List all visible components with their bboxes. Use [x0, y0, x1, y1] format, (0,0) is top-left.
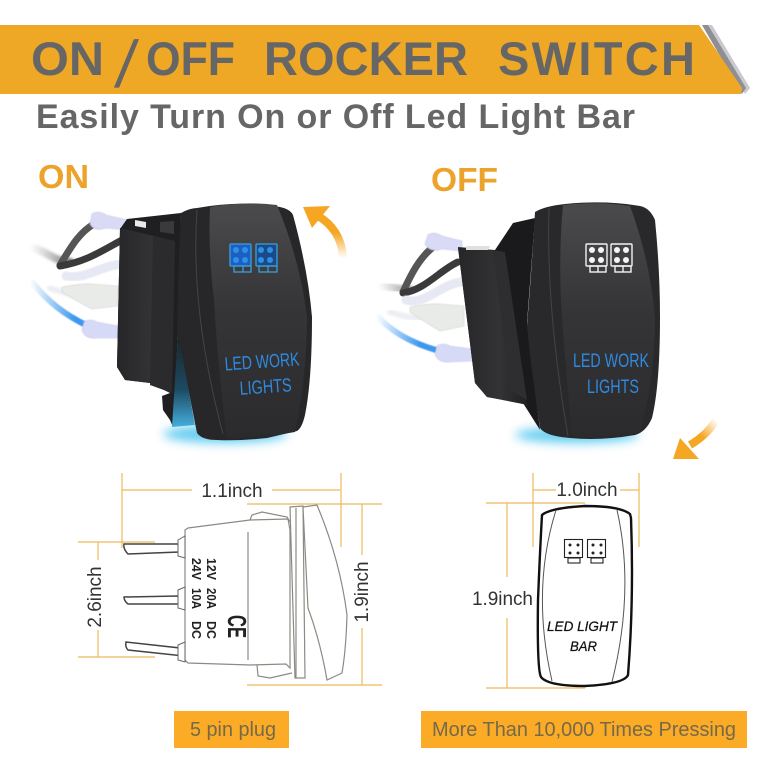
- switch side outline: [185, 505, 347, 680]
- dimension lines: [78, 473, 382, 685]
- wires: [30, 224, 122, 326]
- dimension: 2.6inch: 2.6inch: [85, 566, 106, 628]
- front dimension drawing: [472, 473, 639, 688]
- OFF switch illustration: [378, 202, 660, 443]
- dimension: 1.1inch: 1.1inch: [201, 481, 263, 502]
- switch legend: LIGHTS: [239, 375, 292, 400]
- wires: [378, 248, 462, 350]
- rocker face: [210, 203, 307, 438]
- rocker outline: [538, 506, 632, 686]
- switch rating markings: 24V: [189, 558, 204, 580]
- switch rating markings: [189, 558, 219, 640]
- dimension: 1.0inch: 1.0inch: [556, 480, 618, 501]
- white lamp icons: [586, 244, 632, 272]
- arrow: rotate up: [303, 206, 343, 258]
- title text: SWITCH: [498, 32, 695, 85]
- switch rating markings: DC: [204, 621, 219, 640]
- connectors: [90, 212, 127, 230]
- title text: ON: [31, 32, 104, 85]
- rocker: [177, 204, 312, 440]
- switch rating markings: 20A: [204, 588, 219, 610]
- dimension: 1.9inch: 1.9inch: [352, 561, 373, 623]
- lamp icons: [564, 540, 606, 563]
- switch legend: [573, 351, 649, 398]
- pins: [124, 536, 185, 662]
- arrow: rotate down: [673, 420, 716, 459]
- title text: [31, 28, 695, 102]
- label: press life: More Than 10,000 Times Pressing: [432, 718, 736, 741]
- side dimension drawing: [78, 473, 382, 685]
- ON label: ON: [38, 158, 89, 195]
- connectors: [425, 233, 462, 251]
- glow: [163, 425, 287, 443]
- label: 5 pin plug: [174, 711, 289, 748]
- housing: [458, 218, 540, 430]
- switch legend: LIGHTS: [587, 377, 639, 398]
- under glow wedge: [172, 333, 195, 427]
- label: press life: [421, 711, 747, 748]
- glow: [515, 427, 639, 443]
- blue lamp icons: [230, 244, 277, 272]
- OFF label: OFF: [431, 161, 498, 198]
- switch legend: LED WORK: [573, 351, 649, 372]
- switch rating markings: 12V: [204, 558, 219, 580]
- title text: ROCKER: [264, 32, 468, 85]
- switch rating markings: DC: [189, 621, 204, 640]
- rocker face: [560, 203, 655, 437]
- switch legend: LED WORK: [224, 349, 300, 376]
- CE mark: CE: [222, 615, 252, 638]
- rocker: [527, 202, 660, 439]
- switch rating markings: 10A: [189, 588, 204, 610]
- dimension lines: [486, 473, 639, 688]
- title text: OFF: [146, 32, 235, 85]
- switch legend: [224, 349, 300, 400]
- dimension: 1.9inch: 1.9inch: [472, 589, 533, 610]
- title banner: [0, 25, 750, 102]
- ON switch illustration: [30, 203, 312, 443]
- legend text: [547, 618, 618, 654]
- housing: [117, 213, 181, 427]
- subtitle: Easily Turn On or Off Led Light Bar: [36, 98, 635, 136]
- legend text: BAR: [570, 638, 597, 654]
- legend text: LED LIGHT: [547, 618, 618, 634]
- title text: /: [112, 28, 141, 102]
- label: 5 pin plug: 5 pin plug: [190, 719, 276, 741]
